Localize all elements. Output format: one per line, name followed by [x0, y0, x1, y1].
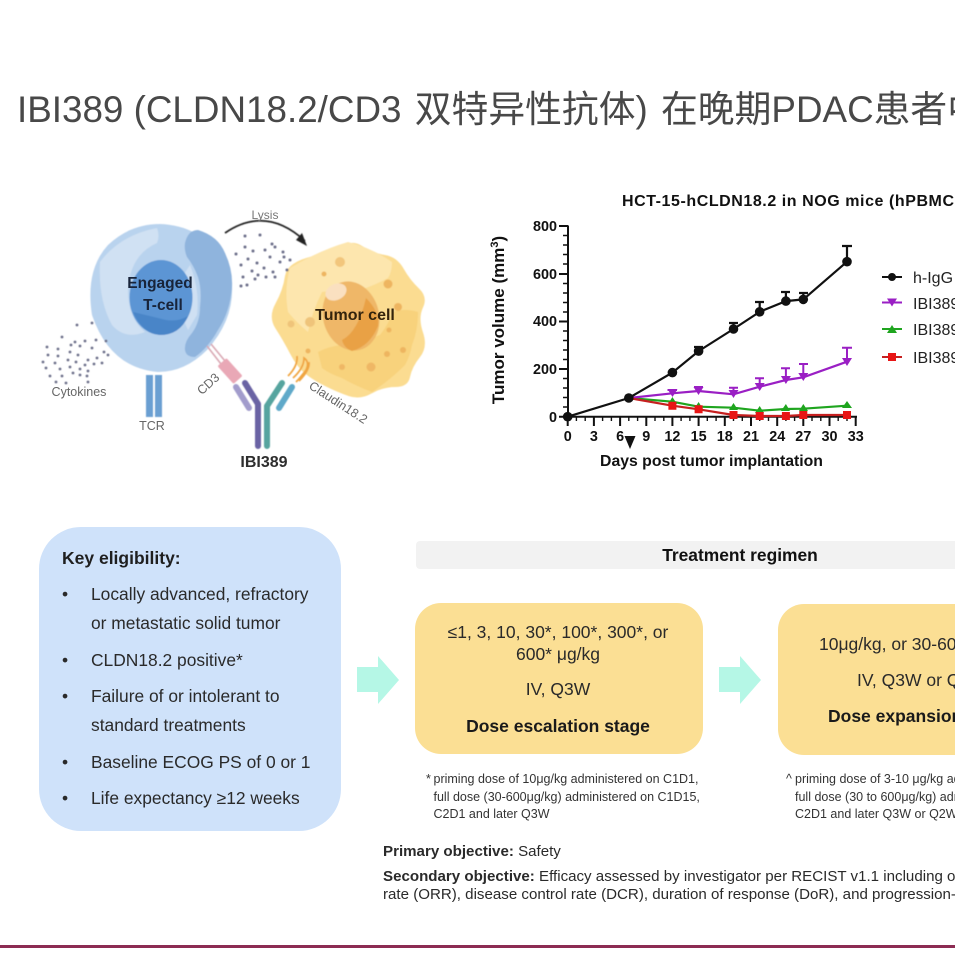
series: green: [629, 397, 852, 413]
illustration labels: T-cell: [143, 297, 183, 314]
x tick labels: 3: [590, 429, 598, 445]
dosing marker: [624, 436, 636, 449]
panel: dose escalation stage: Dose escalation stage: [466, 716, 650, 736]
objectives: Primary objective: Safety: [383, 843, 561, 860]
CD3: [207, 344, 242, 384]
cytokine dots: [43, 323, 108, 383]
x tick labels: 0: [564, 429, 572, 445]
y tick labels: [533, 219, 557, 426]
antibody: [236, 383, 292, 446]
panel: dose escalation stage: 600* μg/kg: [516, 644, 600, 664]
chart: tumor volume: [489, 193, 955, 470]
legend: h-IgG: [913, 270, 953, 287]
eligibility list: standard treatments: [91, 715, 246, 735]
x tick labels: 18: [717, 429, 733, 445]
footnote: escalation: full dose (30-600μg/kg) administered on C1D15,: [434, 790, 700, 804]
footnote: escalation: priming dose of 10μg/kg administered on C1D1,: [434, 772, 698, 786]
lysis dots: [236, 235, 290, 286]
footnote: escalation: [426, 772, 700, 821]
y tick labels: 600: [533, 267, 557, 283]
chart title: HCT-15-hCLDN18.2 in NOG mice (hPBMC: [622, 193, 954, 210]
panel: dose expansion stage: [778, 604, 955, 755]
series: purple: [629, 348, 852, 398]
TCR: [146, 375, 162, 417]
panel: dose escalation stage: IV, Q3W: [526, 679, 591, 699]
y tick labels: 400: [533, 314, 557, 330]
treatment regimen heading: [416, 541, 955, 569]
y tick labels: 200: [533, 362, 557, 378]
eligibility list: •: [62, 584, 68, 604]
x tick labels: 30: [821, 429, 838, 445]
x tick labels: 9: [642, 429, 650, 445]
x tick labels: 24: [769, 429, 785, 445]
illustration labels: [52, 208, 395, 471]
x tick labels: 15: [691, 429, 707, 445]
x tick labels: 33: [848, 429, 864, 445]
eligibility list: •: [62, 788, 68, 808]
y axis: [559, 226, 568, 418]
lysis arrow: [225, 221, 307, 246]
illustration artwork: [43, 221, 425, 446]
illustration labels: Lysis: [252, 208, 278, 222]
footnote: expansion: [786, 772, 955, 821]
arrow: eligibility to escalation: [357, 656, 399, 704]
y tick labels: 0: [549, 410, 557, 426]
eligibility list: Locally advanced, refractory: [91, 584, 309, 604]
illustration labels: TCR: [139, 419, 165, 433]
y tick labels: 800: [533, 219, 557, 235]
x axis: [567, 417, 857, 426]
x axis title: Days post tumor implantation: [600, 453, 823, 470]
eligibility list: Life expectancy ≥12 weeks: [91, 788, 300, 808]
y axis title: ): [489, 236, 508, 242]
eligibility list: or metastatic solid tumor: [91, 613, 281, 633]
eligibility list: •: [62, 752, 68, 772]
x tick labels: 12: [664, 429, 680, 445]
panel: dose escalation stage: [415, 603, 703, 754]
objectives: [383, 843, 955, 903]
eligibility heading: Key eligibility:: [62, 548, 181, 568]
arrow: escalation to expansion: [719, 656, 761, 704]
footnote: expansion: ^: [786, 772, 792, 786]
legend: [882, 270, 955, 367]
footnote: escalation: *: [426, 772, 431, 786]
illustration labels: Claudin18.2: [306, 379, 370, 427]
eligibility list: Failure of or intolerant to: [91, 686, 280, 706]
eligibility list: •: [62, 686, 68, 706]
eligibility list: Baseline ECOG PS of 0 or 1: [91, 752, 310, 772]
footnote: expansion: C2D1 and later Q3W or Q2W: [795, 807, 955, 821]
illustration labels: IBI389: [240, 454, 288, 471]
y axis title: Tumor volume (mm: [489, 248, 508, 404]
eligibility list: •: [62, 650, 68, 670]
x tick labels: 6: [616, 429, 624, 445]
footnote: escalation: C2D1 and later Q3W: [434, 807, 550, 821]
illustration labels: Cytokines: [52, 385, 106, 399]
panel: dose escalation stage: ≤1, 3, 10, 30*, 100*, 300*, or: [448, 622, 669, 642]
eligibility list: [62, 584, 310, 808]
mechanism illustration: [43, 208, 425, 471]
y axis title: 3: [489, 242, 501, 248]
illustration labels: Tumor cell: [315, 307, 395, 324]
x tick labels: 27: [795, 429, 811, 445]
x tick labels: [564, 429, 864, 445]
series: red: [629, 398, 851, 420]
treatment regimen heading: Treatment regimen: [662, 545, 818, 565]
panel: key eligibility: [39, 527, 341, 831]
illustration labels: CD3: [194, 370, 222, 398]
x tick labels: 21: [743, 429, 759, 445]
tumor cell: [272, 242, 425, 398]
claudin18.2: [288, 356, 309, 382]
T-cell: [90, 224, 232, 372]
series: black: [563, 246, 852, 422]
illustration labels: Engaged: [127, 275, 193, 292]
footer rule: [0, 945, 955, 948]
eligibility list: CLDN18.2 positive*: [91, 650, 243, 670]
